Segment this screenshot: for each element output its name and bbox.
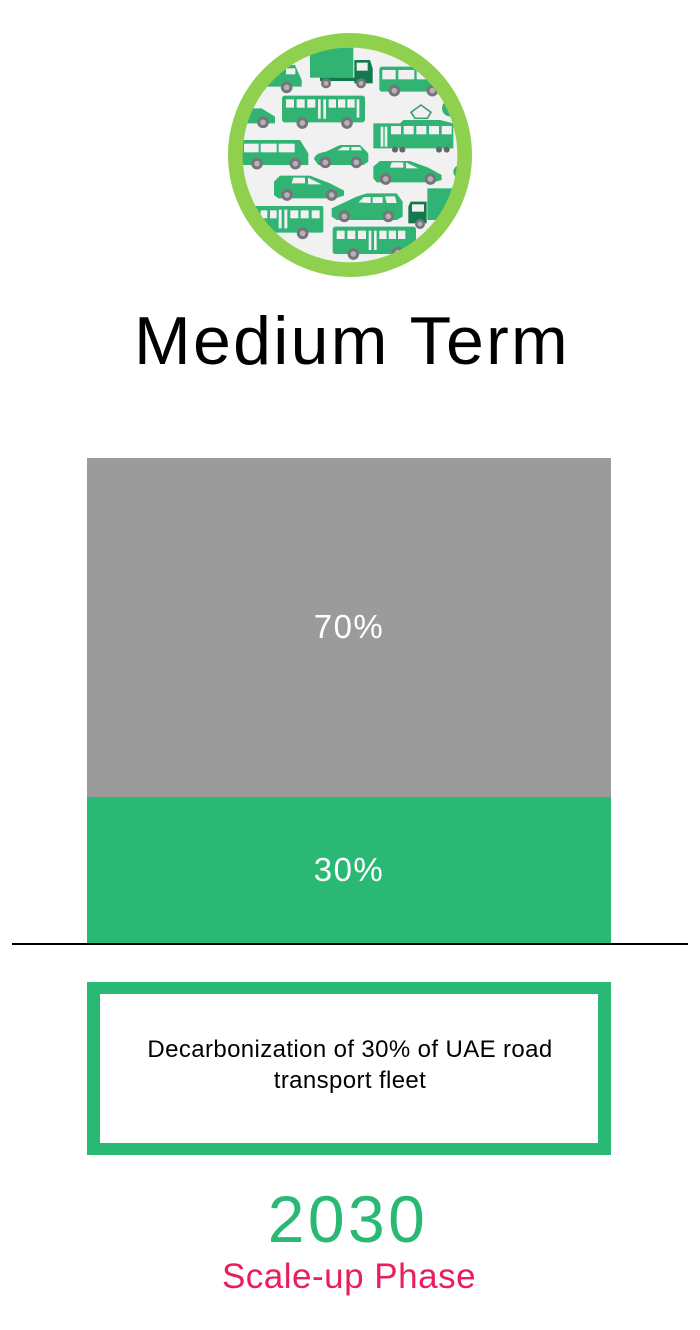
- baseline: [12, 943, 688, 945]
- car left: [243, 108, 275, 127]
- truck top: [310, 48, 373, 87]
- bus left: [240, 140, 308, 168]
- callout text: Decarbonization of 30% of UAE road: [147, 1036, 553, 1063]
- taxi centre: [274, 176, 344, 199]
- SUV: [332, 193, 403, 221]
- taxi right: [373, 161, 442, 183]
- bar segment: 70%: [87, 458, 611, 797]
- stacked bar chart: [87, 458, 611, 943]
- title: Medium Term: [134, 303, 570, 379]
- tram: [373, 105, 453, 153]
- edge vehicles: [442, 103, 457, 176]
- value label: 70%: 70%: [314, 608, 384, 645]
- callout text: [147, 1036, 553, 1094]
- truck right: [408, 188, 457, 228]
- year: 2030: [268, 1182, 428, 1256]
- callout text: transport fleet: [274, 1067, 426, 1094]
- phase label: Scale-up Phase: [222, 1257, 476, 1296]
- bar segment: 30%: [87, 797, 611, 943]
- car top left: [263, 65, 302, 92]
- value label: 30%: 30%: [314, 851, 384, 888]
- bus middle: [282, 96, 365, 127]
- bus top right: [379, 67, 443, 95]
- callout box: [87, 982, 611, 1155]
- bus bottom: [333, 227, 416, 258]
- icon: road vehicles in green ring: [228, 33, 472, 277]
- bus lower left: [250, 206, 323, 238]
- car centre: [314, 145, 368, 167]
